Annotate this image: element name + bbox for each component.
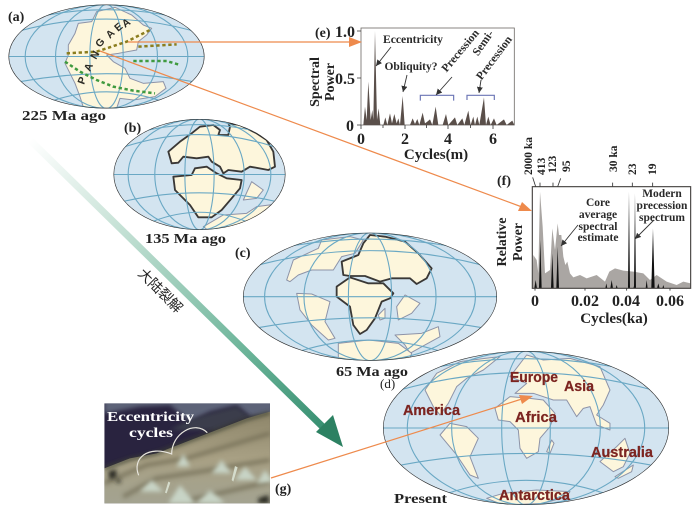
f top period labels: 30 ka: [608, 145, 620, 172]
e axis values: 4: [444, 131, 452, 148]
globe (c): 65 Ma: [243, 233, 497, 363]
f top period labels: 23: [627, 163, 639, 175]
PANGAEA label: G: [93, 36, 108, 50]
photo caption: [107, 410, 194, 441]
age label 65 Ma: 65 Ma ago: [336, 365, 408, 380]
e annotations: Eccentricity: [383, 34, 443, 46]
chart (f): relative power: average: [579, 209, 617, 221]
f top period labels: 123: [547, 156, 559, 173]
continent names: Asia: [564, 378, 595, 395]
chart (f): relative power: spectrum: [639, 212, 685, 224]
globe (d): present: [383, 351, 669, 505]
PANGAEA label: [76, 16, 133, 86]
chart (e): spectral power: Obliquity?: [384, 61, 438, 73]
chart (f): relative power: precession: [637, 200, 688, 212]
label (b): (b): [124, 121, 141, 136]
arrow: g to d: [271, 395, 533, 478]
continent names: Europe: [510, 369, 558, 386]
f axis values: 0.06: [656, 293, 684, 310]
spectrum e: [362, 31, 514, 125]
label present: Present: [394, 492, 447, 507]
e axis values: 0: [357, 131, 365, 148]
e axis values: 0.5: [335, 71, 355, 88]
PANGAEA label: A: [82, 61, 96, 73]
PANGAEA label: A: [120, 16, 133, 30]
age label 135 Ma: 135 Ma ago: [145, 232, 226, 247]
label (a): (a): [8, 10, 25, 25]
f axis values: 0: [531, 293, 539, 310]
e axis values: [335, 24, 497, 148]
f axis values: 0.02: [571, 293, 599, 310]
f axis titles: Relative: [495, 218, 510, 266]
label (e): (e): [315, 26, 331, 41]
arrow: a to f: [100, 51, 532, 211]
f axis values: [531, 293, 684, 310]
e axis values: 6: [489, 131, 497, 148]
photo (g): eccentricity cycles outcrop: [104, 400, 273, 505]
chart (f): relative power: Cycles(ka): [580, 311, 648, 327]
photo caption: cycles: [129, 426, 174, 441]
chart (f): relative power: spectral: [579, 221, 617, 233]
core average spectrum: [532, 192, 691, 288]
arrow: a to e: [128, 37, 362, 47]
label: continental breakup: 大陆裂解: [135, 265, 186, 316]
e axis values: 1.0: [335, 24, 355, 41]
globe (a): Pangaea 225 Ma: [8, 4, 204, 108]
PANGAEA label: A: [104, 27, 118, 41]
label (g): (g): [275, 482, 292, 497]
f top period labels: [523, 137, 659, 175]
globe (b): 135 Ma: [114, 119, 286, 232]
chart (e): spectral power: Precession: [474, 34, 515, 82]
f top period labels: 95: [561, 160, 573, 172]
chart (f): relative power: Power: [511, 223, 526, 261]
f axis values: 0.04: [612, 293, 640, 310]
chart (e): spectral power: [308, 24, 515, 163]
label (d): (d): [380, 376, 395, 391]
chart (e): spectral power: Cycles(m): [404, 147, 468, 163]
continent names: [403, 369, 654, 504]
chart (f): relative power: [495, 137, 691, 327]
modern precession spectrum: [534, 192, 664, 288]
PANGAEA label: P: [76, 75, 89, 86]
chart (f): relative power: Modern: [642, 188, 682, 200]
f top period labels: 2000 ka: [523, 137, 535, 175]
chart (e): spectral power: Power: [323, 63, 338, 101]
climate belts on Pangaea: [65, 30, 180, 93]
continent names: America: [403, 402, 461, 419]
e axis values: 0: [346, 118, 354, 135]
chart (e): spectral power: Precession: [440, 27, 482, 75]
age label 225 Ma: 225 Ma ago: [22, 109, 106, 124]
continent names: Australia: [591, 444, 654, 461]
e axis values: 2: [401, 131, 409, 148]
chart (e): spectral power: Semi-: [471, 28, 497, 58]
e axis titles: Spectral: [308, 57, 323, 107]
PANGAEA label: N: [88, 49, 102, 62]
PANGAEA label: E: [112, 21, 125, 34]
label (f): (f): [497, 174, 511, 189]
arrow: continental breakup timeline: [30, 140, 343, 447]
chart (f): relative power: estimate: [578, 232, 618, 244]
f top period labels: 413: [536, 158, 548, 175]
f annotations: Core: [586, 197, 610, 209]
photo caption: Eccentricity: [107, 410, 194, 425]
continent names: Antarctica: [499, 487, 571, 504]
label (c): (c): [235, 246, 251, 261]
f top period labels: 19: [647, 163, 659, 175]
continent names: Africa: [515, 409, 558, 426]
